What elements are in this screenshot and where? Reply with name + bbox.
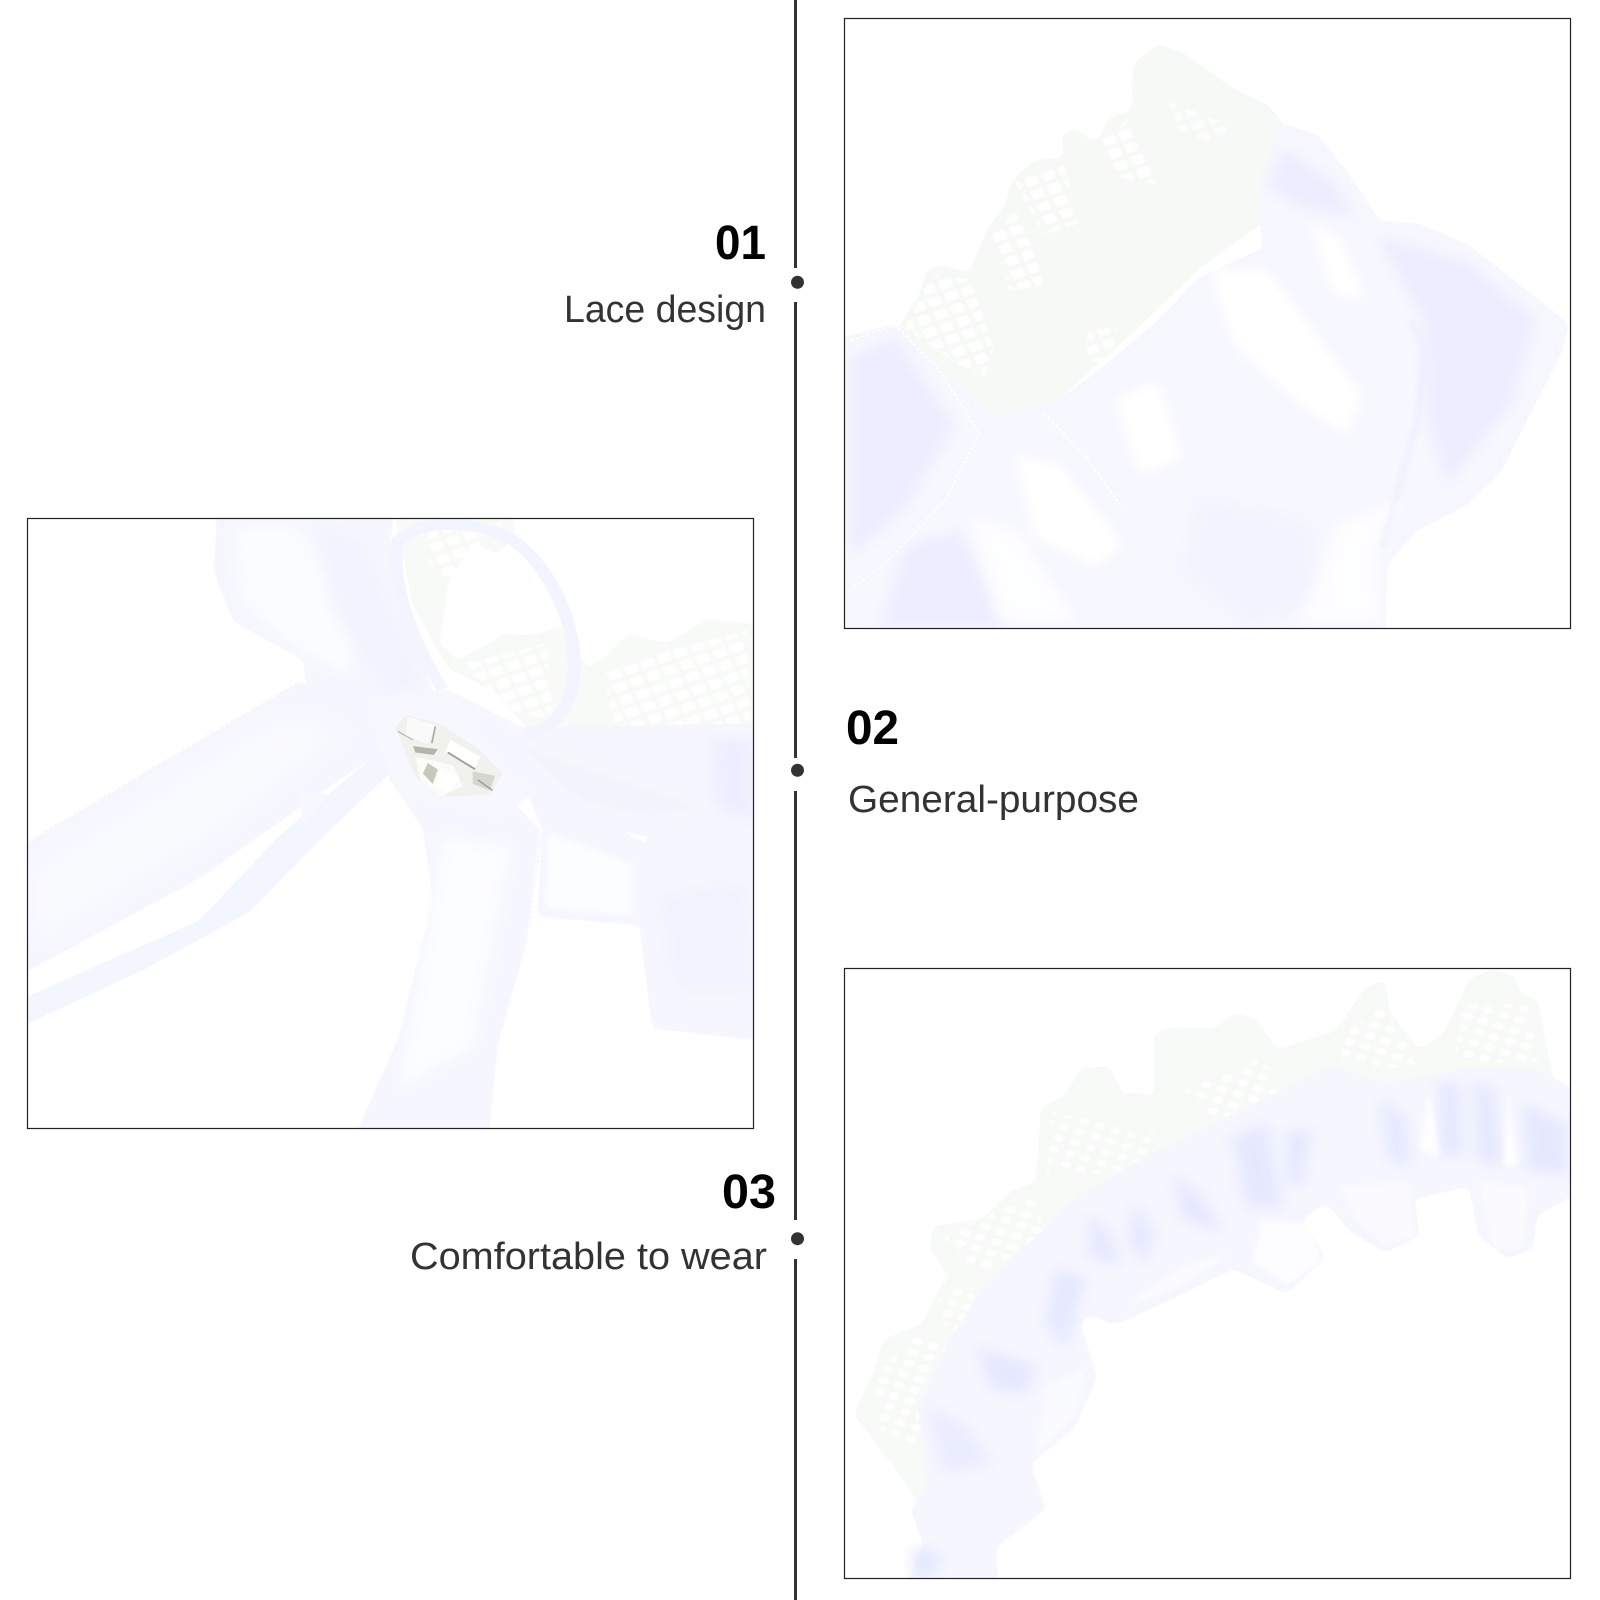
feature 03: comfortable to wear	[410, 1166, 776, 1278]
number 03: 03	[722, 1166, 776, 1219]
satin ruffled band	[898, 1066, 1600, 1600]
panel: bow and rhinestone photo	[0, 483, 796, 1173]
label lace design: Lace design	[564, 289, 766, 331]
satin lavender shading	[850, 147, 1537, 627]
bow right leaf	[473, 727, 707, 824]
satin body	[790, 122, 1569, 673]
lower center ribbon tail	[338, 769, 542, 1173]
label comfortable to wear: Comfortable to wear	[410, 1236, 767, 1278]
number 02: 02	[846, 702, 899, 755]
panel frame	[844, 968, 1570, 1578]
feature 02: general-purpose	[846, 702, 1139, 821]
satin lavender fold shading	[913, 1083, 1567, 1576]
lace upper edge	[854, 969, 1600, 1547]
vertical timeline	[791, 0, 804, 1600]
right satin band	[498, 723, 796, 1045]
panel: lace close-up photo	[790, 18, 1571, 673]
thin lower ribbon	[0, 748, 398, 1047]
panel frame	[28, 518, 754, 1128]
satin highlights	[1036, 1087, 1528, 1456]
lace band	[895, 44, 1285, 417]
rhinestone ornament	[395, 715, 503, 797]
lower left ribbon tail	[0, 681, 398, 1001]
number 01: 01	[715, 217, 766, 270]
bow knot	[368, 689, 537, 820]
thin ribbon loop	[398, 524, 574, 736]
label general-purpose: General-purpose	[848, 779, 1139, 821]
panel frame	[844, 18, 1570, 628]
lace top and right	[388, 483, 796, 752]
feature 01: lace design	[564, 217, 766, 331]
upper bow loop	[214, 483, 438, 723]
panel: full garter arc photo	[844, 968, 1600, 1600]
satin highlights	[969, 219, 1407, 623]
satin edge stitching	[850, 325, 1124, 589]
